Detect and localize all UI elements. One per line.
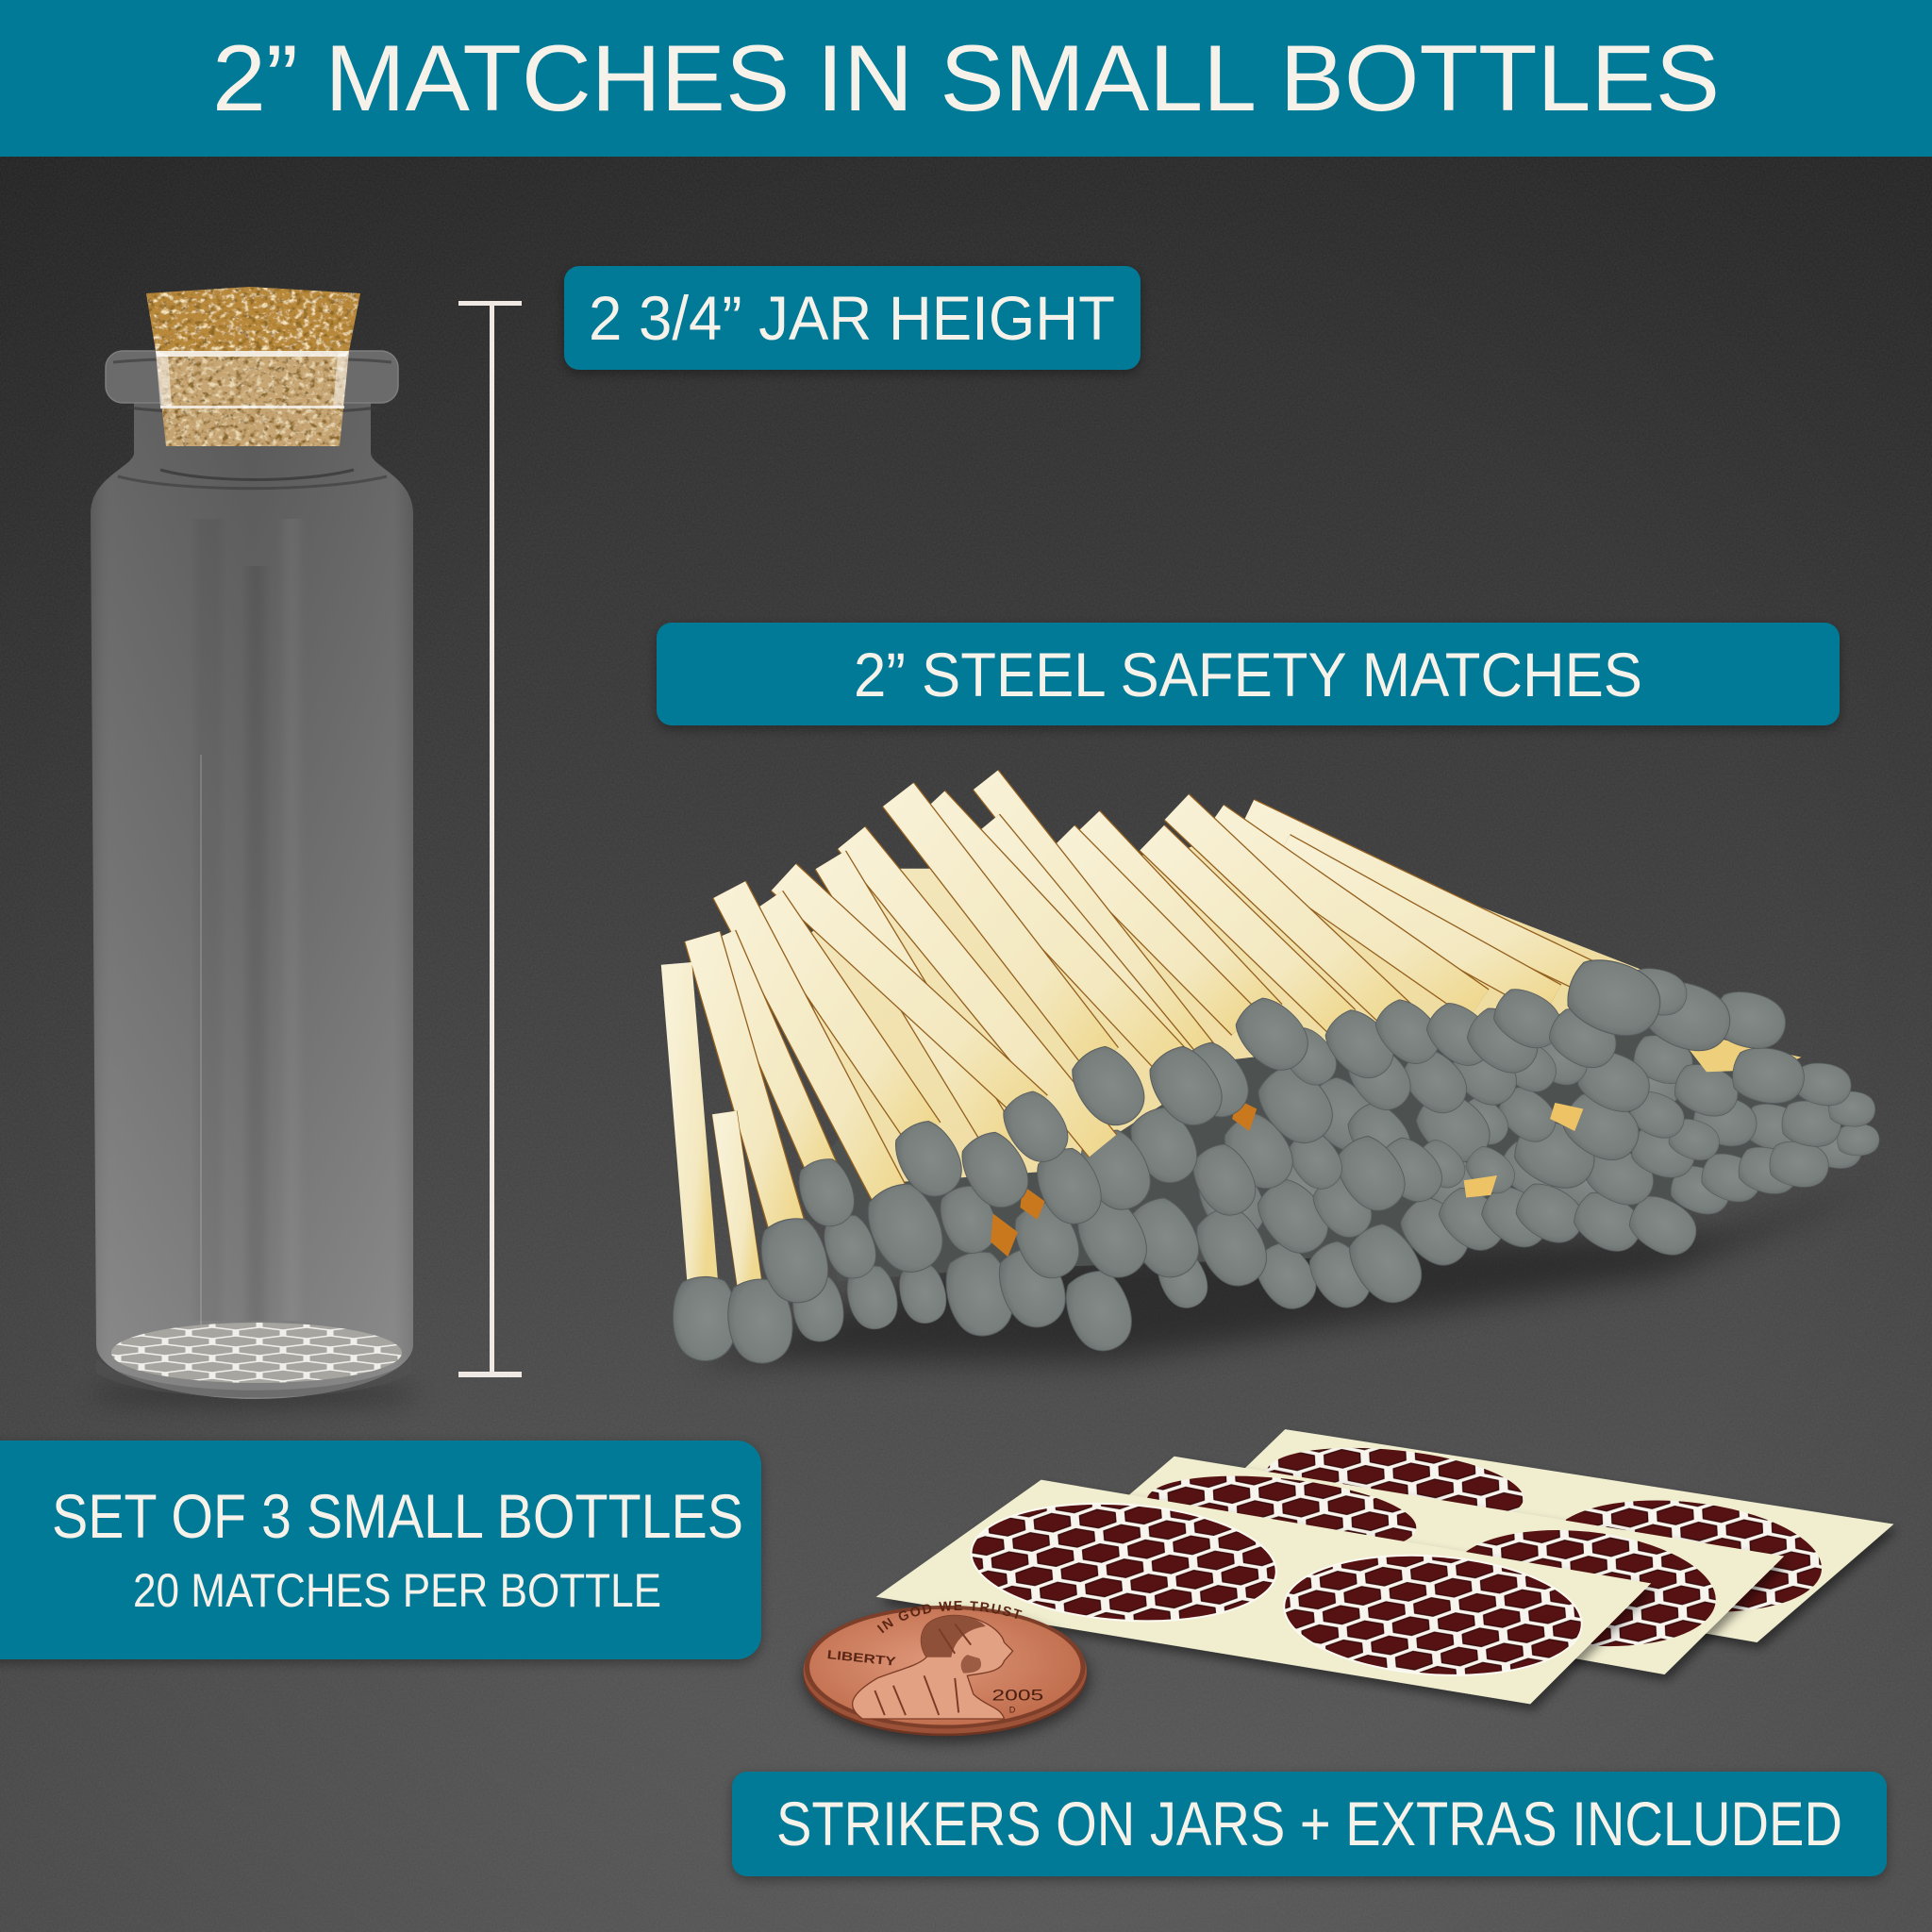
penny: IN GOD WE TRUST: [877, 1601, 1023, 1634]
title banner: [0, 0, 1932, 157]
penny: D: [1009, 1705, 1016, 1714]
striker disk in bottle: [111, 1323, 402, 1383]
striker cards and penny: [798, 1429, 1895, 1749]
penny: 2005: [991, 1686, 1043, 1704]
label: set of 3 small bottles: SET OF 3 SMALL BOTTLES: [52, 1481, 743, 1551]
glass bottle with cork: [90, 287, 420, 1407]
wooden match sticks: [676, 780, 1614, 1293]
pile of matches: [672, 780, 1885, 1367]
back striker card: [1171, 1429, 1893, 1642]
bottle lip: [106, 351, 398, 403]
bottle body: [91, 403, 413, 1399]
label: jar height: [564, 266, 1141, 370]
penny: [798, 1601, 1094, 1749]
label: steel safety matches: 2” STEEL SAFETY MATCHES: [854, 640, 1642, 709]
title: 2” MATCHES IN SMALL BOTTLES: [212, 25, 1720, 130]
sub-label: matches per bottle: 20 MATCHES PER BOTTLE: [133, 1564, 661, 1617]
label: strikers: [732, 1772, 1887, 1876]
penny: LIBERTY: [826, 1647, 897, 1669]
front striker card: [876, 1480, 1651, 1704]
height ruler: [458, 301, 522, 1377]
lower match heads: [788, 1025, 1879, 1359]
orange gaps near heads: [991, 1099, 1257, 1257]
label: steel safety matches: [657, 623, 1840, 725]
top row match heads: [672, 950, 1791, 1367]
label: jar height: 2 3/4” JAR HEIGHT: [589, 283, 1115, 353]
middle striker card: [1047, 1457, 1784, 1674]
president profile: [853, 1615, 1013, 1719]
cork: [146, 287, 360, 446]
label: set of 3 small bottles: [0, 1441, 761, 1659]
